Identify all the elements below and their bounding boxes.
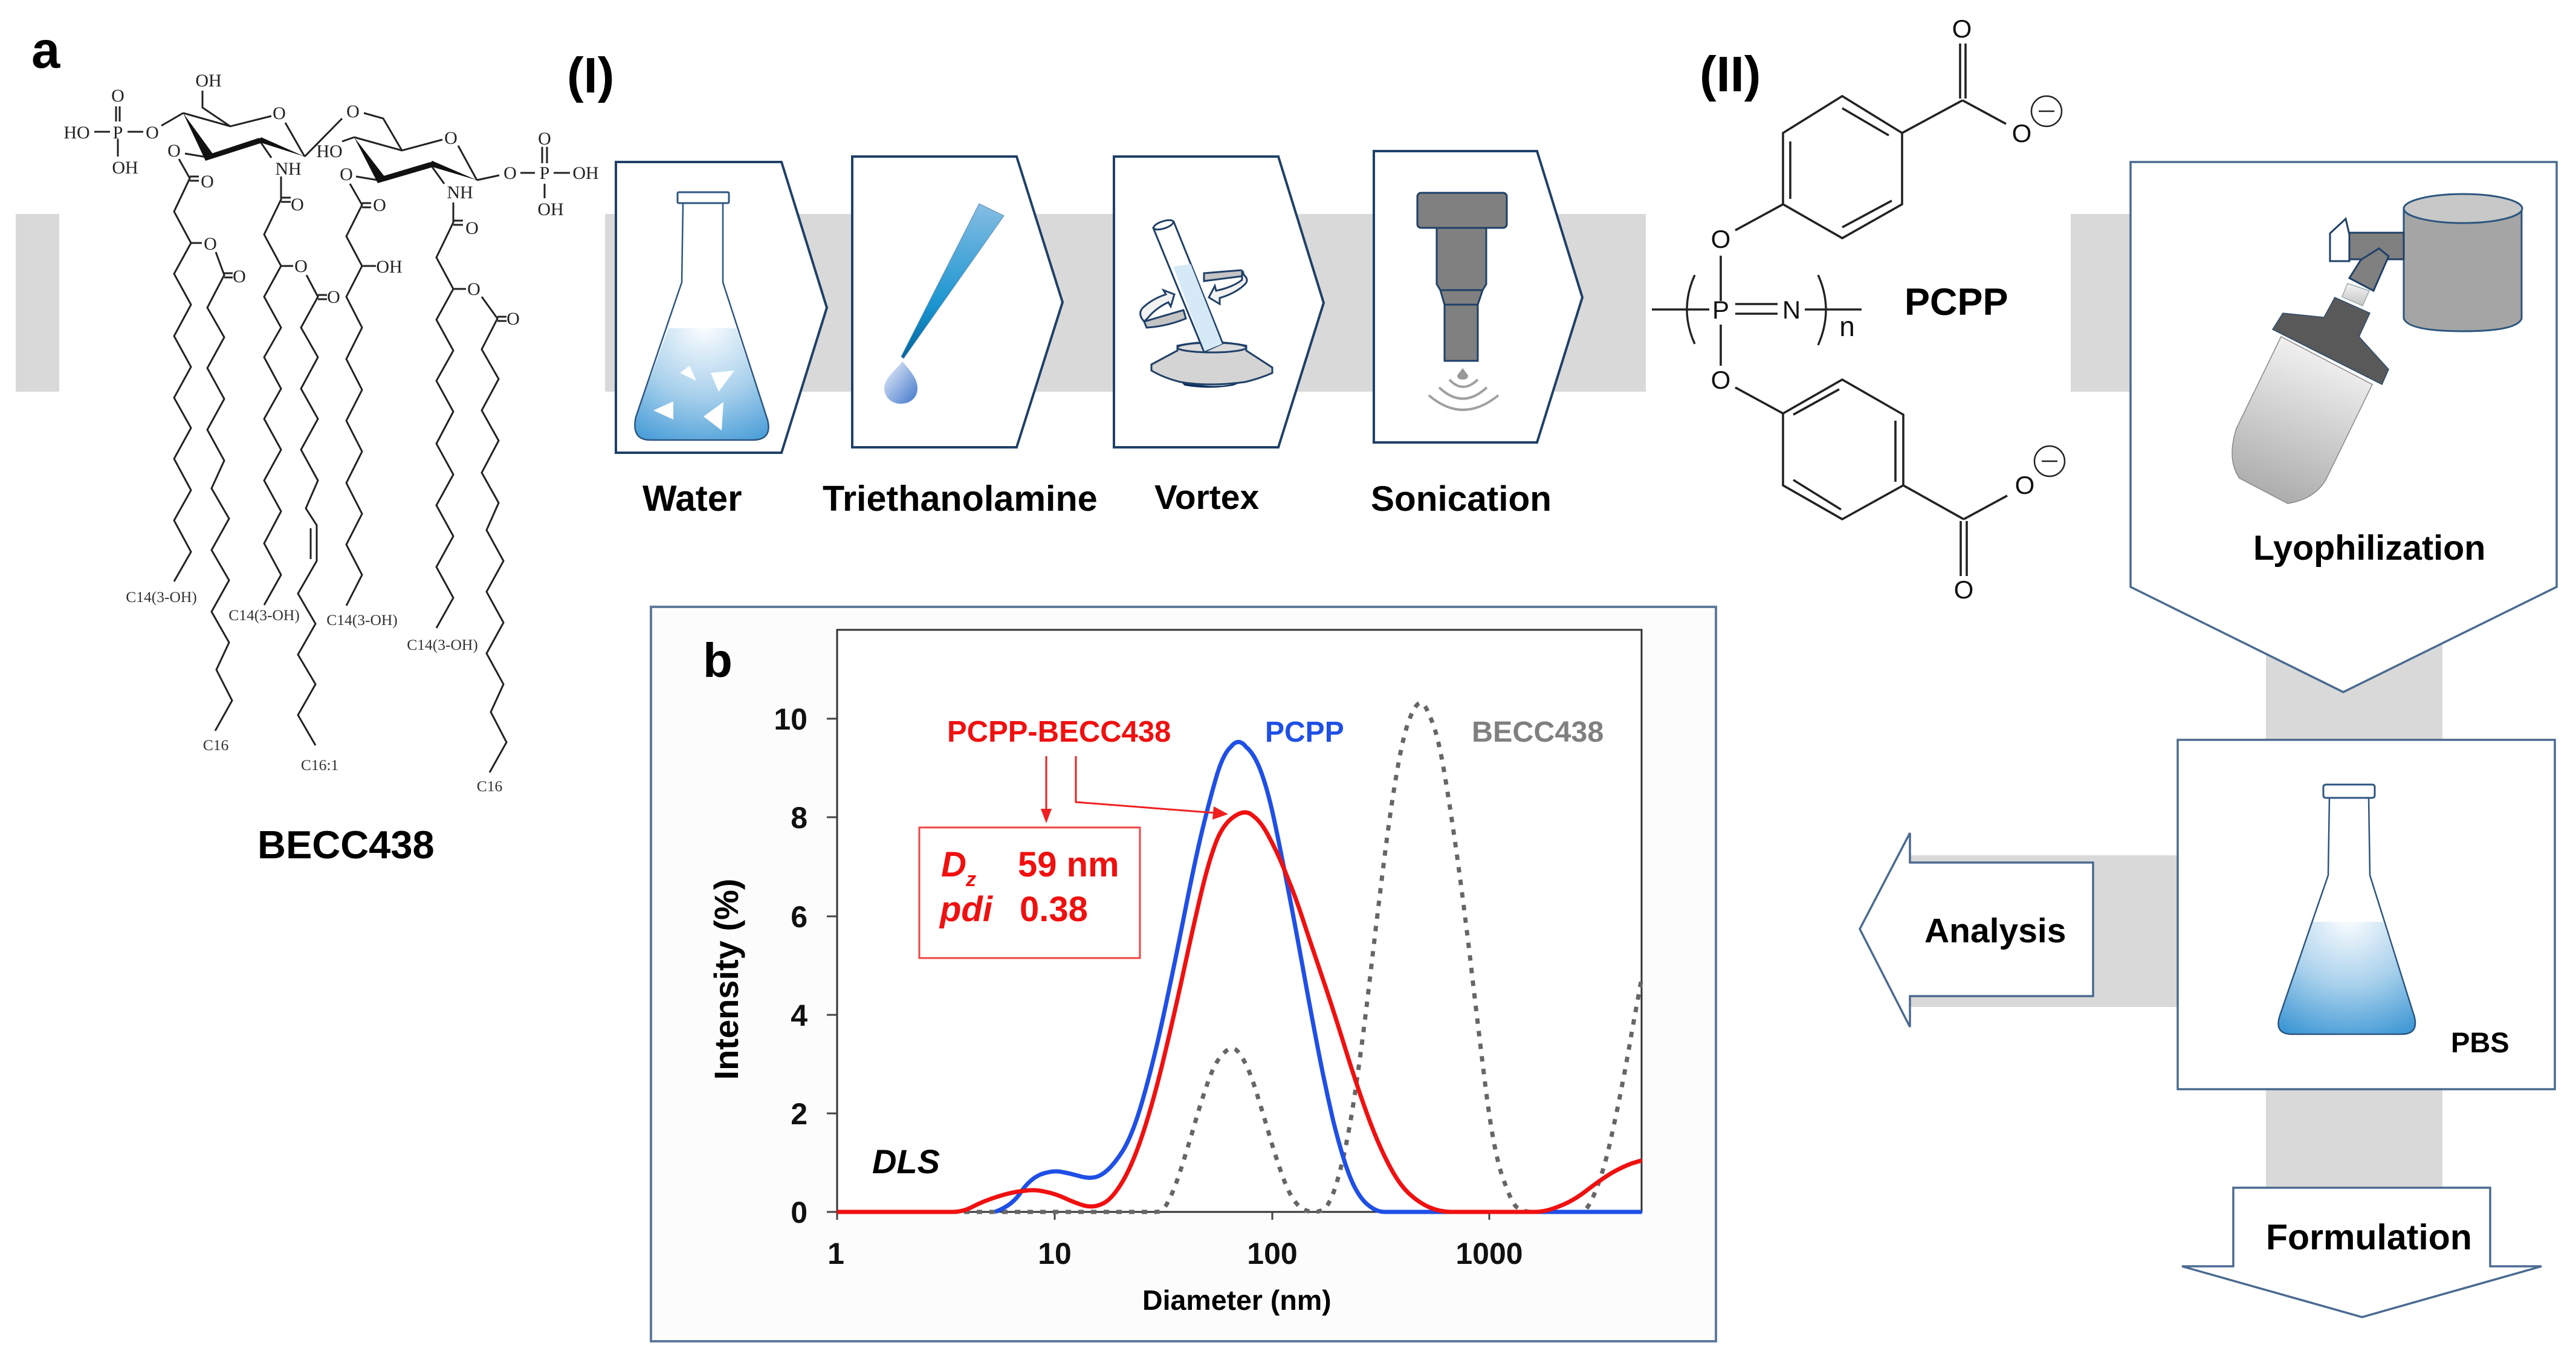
step: sonication [1371, 151, 1582, 519]
atom labels of PCPP: O [1711, 366, 1730, 394]
atom labels of BECC438: OH [195, 71, 222, 91]
atom labels of PCPP: O [1711, 225, 1730, 253]
atom labels of PCPP: n [1839, 311, 1855, 342]
y axis numbers: 0 [791, 1196, 807, 1229]
arrow shape formulation [2182, 1188, 2542, 1317]
chemical structure: PCPP [1652, 15, 2065, 604]
atom labels of PCPP [1711, 15, 2034, 604]
label triethanolamine: Triethanolamine [823, 478, 1098, 519]
bonds of PCPP [1652, 44, 2007, 576]
chain labels: C16 [477, 777, 502, 795]
curve: PCPP blue [995, 742, 1642, 1212]
chain labels: C14(3-OH) [407, 636, 478, 653]
x axis numbers: 1 [827, 1237, 844, 1271]
step: PBS [2178, 740, 2555, 1089]
chain labels: C14(3-OH) [326, 611, 398, 629]
atom labels of BECC438: HO [316, 141, 343, 161]
chain labels: C14(3-OH) [228, 606, 300, 624]
icon: sonicator probe [1417, 193, 1507, 410]
label lyophilization: Lyophilization [2253, 529, 2485, 568]
bonds of BECC438 [94, 91, 570, 772]
callout: Dz and pdi: D [941, 845, 966, 884]
panel: DLS chart [651, 607, 1716, 1341]
x axis title: Diameter (nm) [1142, 1284, 1332, 1316]
chain labels [126, 588, 502, 795]
atom labels of PCPP: O [1952, 15, 1972, 43]
atom labels of BECC438: O [340, 164, 353, 184]
atom labels of BECC438: HO [63, 123, 90, 143]
chain labels: C14(3-OH) [126, 588, 197, 606]
atom labels of BECC438: O [467, 279, 481, 299]
y axis numbers: 8 [791, 801, 807, 835]
curve: BECC438 dotted [837, 703, 1642, 1212]
atom labels of PCPP: O [2015, 471, 2034, 499]
x axis numbers [827, 1237, 1523, 1271]
PCPP name: PCPP [1904, 281, 2008, 323]
atom labels of BECC438: O [204, 234, 217, 254]
negative charge top [2031, 96, 2062, 126]
step: water [616, 162, 827, 519]
atom labels of BECC438: NH [447, 183, 473, 202]
x axis numbers: 10 [1038, 1237, 1072, 1271]
arrow shape analysis [1860, 833, 2093, 1027]
step box sonication [1374, 151, 1582, 442]
icon: pipette with drop [884, 204, 1004, 404]
atom labels of PCPP: O [1954, 575, 1973, 604]
x axis numbers: 1000 [1455, 1237, 1523, 1271]
step box vortex [1114, 157, 1324, 447]
heading (II): (II) [1700, 46, 1761, 102]
atom labels of BECC438: OH [537, 199, 564, 219]
label analysis: Analysis [1924, 912, 2066, 950]
step box lyophilization [2131, 162, 2557, 692]
negative charge bottom [2034, 446, 2065, 476]
BECC438 name: BECC438 [257, 823, 435, 867]
stereo wedges right ring [354, 137, 477, 183]
y axis numbers: 10 [774, 702, 807, 736]
plot frame [837, 630, 1642, 1212]
atom labels of BECC438: O [444, 128, 458, 148]
atom labels of BECC438: O [291, 195, 304, 215]
stereo wedges left ring [183, 113, 305, 161]
callout: Dz and pdi [919, 827, 1140, 958]
y axis numbers [774, 702, 807, 1229]
legend: PCPP-BECC438: PCPP-BECC438 [947, 716, 1171, 748]
atom labels of BECC438: O [111, 86, 125, 106]
atom labels of BECC438: P [540, 163, 549, 183]
atom labels of PCPP: O [2012, 119, 2031, 147]
y axis numbers: 2 [791, 1097, 807, 1131]
axis ticks [827, 719, 1489, 1220]
gray process band: toward analysis [1910, 855, 2179, 1007]
y axis numbers: 6 [791, 900, 807, 934]
atom labels of BECC438: O [373, 195, 386, 215]
arrow: legend to red curve [1076, 756, 1228, 820]
atom labels of BECC438: O [503, 163, 517, 183]
icon: freeze dryer flask [2232, 194, 2522, 504]
atom labels of PCPP: P [1712, 296, 1729, 324]
step box water [616, 162, 827, 453]
label PBS: PBS [2451, 1026, 2510, 1058]
gray process band: into lyophilization [2071, 214, 2131, 392]
atom labels of BECC438 [63, 71, 599, 329]
atom labels of BECC438: O [346, 102, 360, 121]
gray process band: steps I [605, 214, 1646, 392]
callout: Dz and pdi: 59 nm [1018, 845, 1119, 884]
icon: flask with shards [635, 192, 769, 440]
step box triethanolamine [852, 157, 1063, 447]
icon: flask with PBS [2279, 785, 2415, 1034]
curve: PCPP-BECC438 red [837, 812, 1642, 1212]
legend: BECC438: BECC438 [1472, 716, 1604, 748]
step: lyophilization [2131, 162, 2557, 692]
atom labels of BECC438: OH [572, 163, 599, 183]
atom labels of BECC438: P [113, 123, 123, 143]
step: triethanolamine [823, 157, 1098, 519]
label vortex: Vortex [1154, 478, 1259, 517]
panel label b: b [703, 633, 733, 687]
gray process band: left of BECC438 [16, 214, 59, 392]
chemical structure: BECC438 [63, 71, 599, 795]
y axis numbers: 4 [791, 999, 807, 1032]
arrow: analysis [1860, 833, 2093, 1027]
icon: vortex mixer [1141, 218, 1272, 388]
callout: Dz and pdi: z [965, 868, 976, 891]
atom labels of BECC438: O [146, 123, 159, 143]
atom labels of BECC438: O [465, 218, 479, 238]
atom labels of BECC438: O [294, 256, 308, 276]
atom labels of BECC438: O [273, 103, 286, 123]
arrow: legend to callout [1041, 756, 1052, 823]
y axis title: Intensity (%) [707, 879, 745, 1080]
polymer brackets [1687, 275, 1826, 345]
callout: Dz and pdi: 0.38 [1020, 890, 1088, 929]
panel label a: a [31, 22, 60, 79]
label formulation: Formulation [2266, 1217, 2472, 1257]
chain labels: C16 [203, 736, 228, 754]
atom labels of BECC438: OH [112, 158, 138, 178]
step: vortex [1114, 157, 1324, 517]
step box PBS [2178, 740, 2555, 1089]
atom labels of BECC438: O [506, 309, 520, 329]
atom labels of PCPP: N [1782, 296, 1801, 324]
label water: Water [642, 478, 742, 519]
chain labels: C16:1 [301, 756, 338, 774]
atom labels of BECC438: O [538, 129, 551, 149]
gray process band: vertical [2266, 635, 2442, 1188]
atom labels of BECC438: O [167, 141, 181, 161]
atom labels of BECC438: O [201, 172, 214, 192]
arrow: formulation [2182, 1188, 2542, 1317]
atom labels of BECC438: O [327, 287, 340, 307]
atom labels of BECC438: NH [275, 159, 302, 179]
label DLS: DLS [872, 1142, 940, 1180]
label sonication: Sonication [1371, 479, 1552, 519]
atom labels of BECC438: O [233, 267, 246, 287]
chart panel frame [651, 607, 1716, 1341]
heading (I): (I) [567, 47, 614, 103]
callout: Dz and pdi: pdi [939, 890, 994, 929]
atom labels of BECC438: OH [376, 257, 403, 277]
x axis numbers: 100 [1247, 1237, 1298, 1271]
legend: PCPP: PCPP [1265, 716, 1344, 748]
